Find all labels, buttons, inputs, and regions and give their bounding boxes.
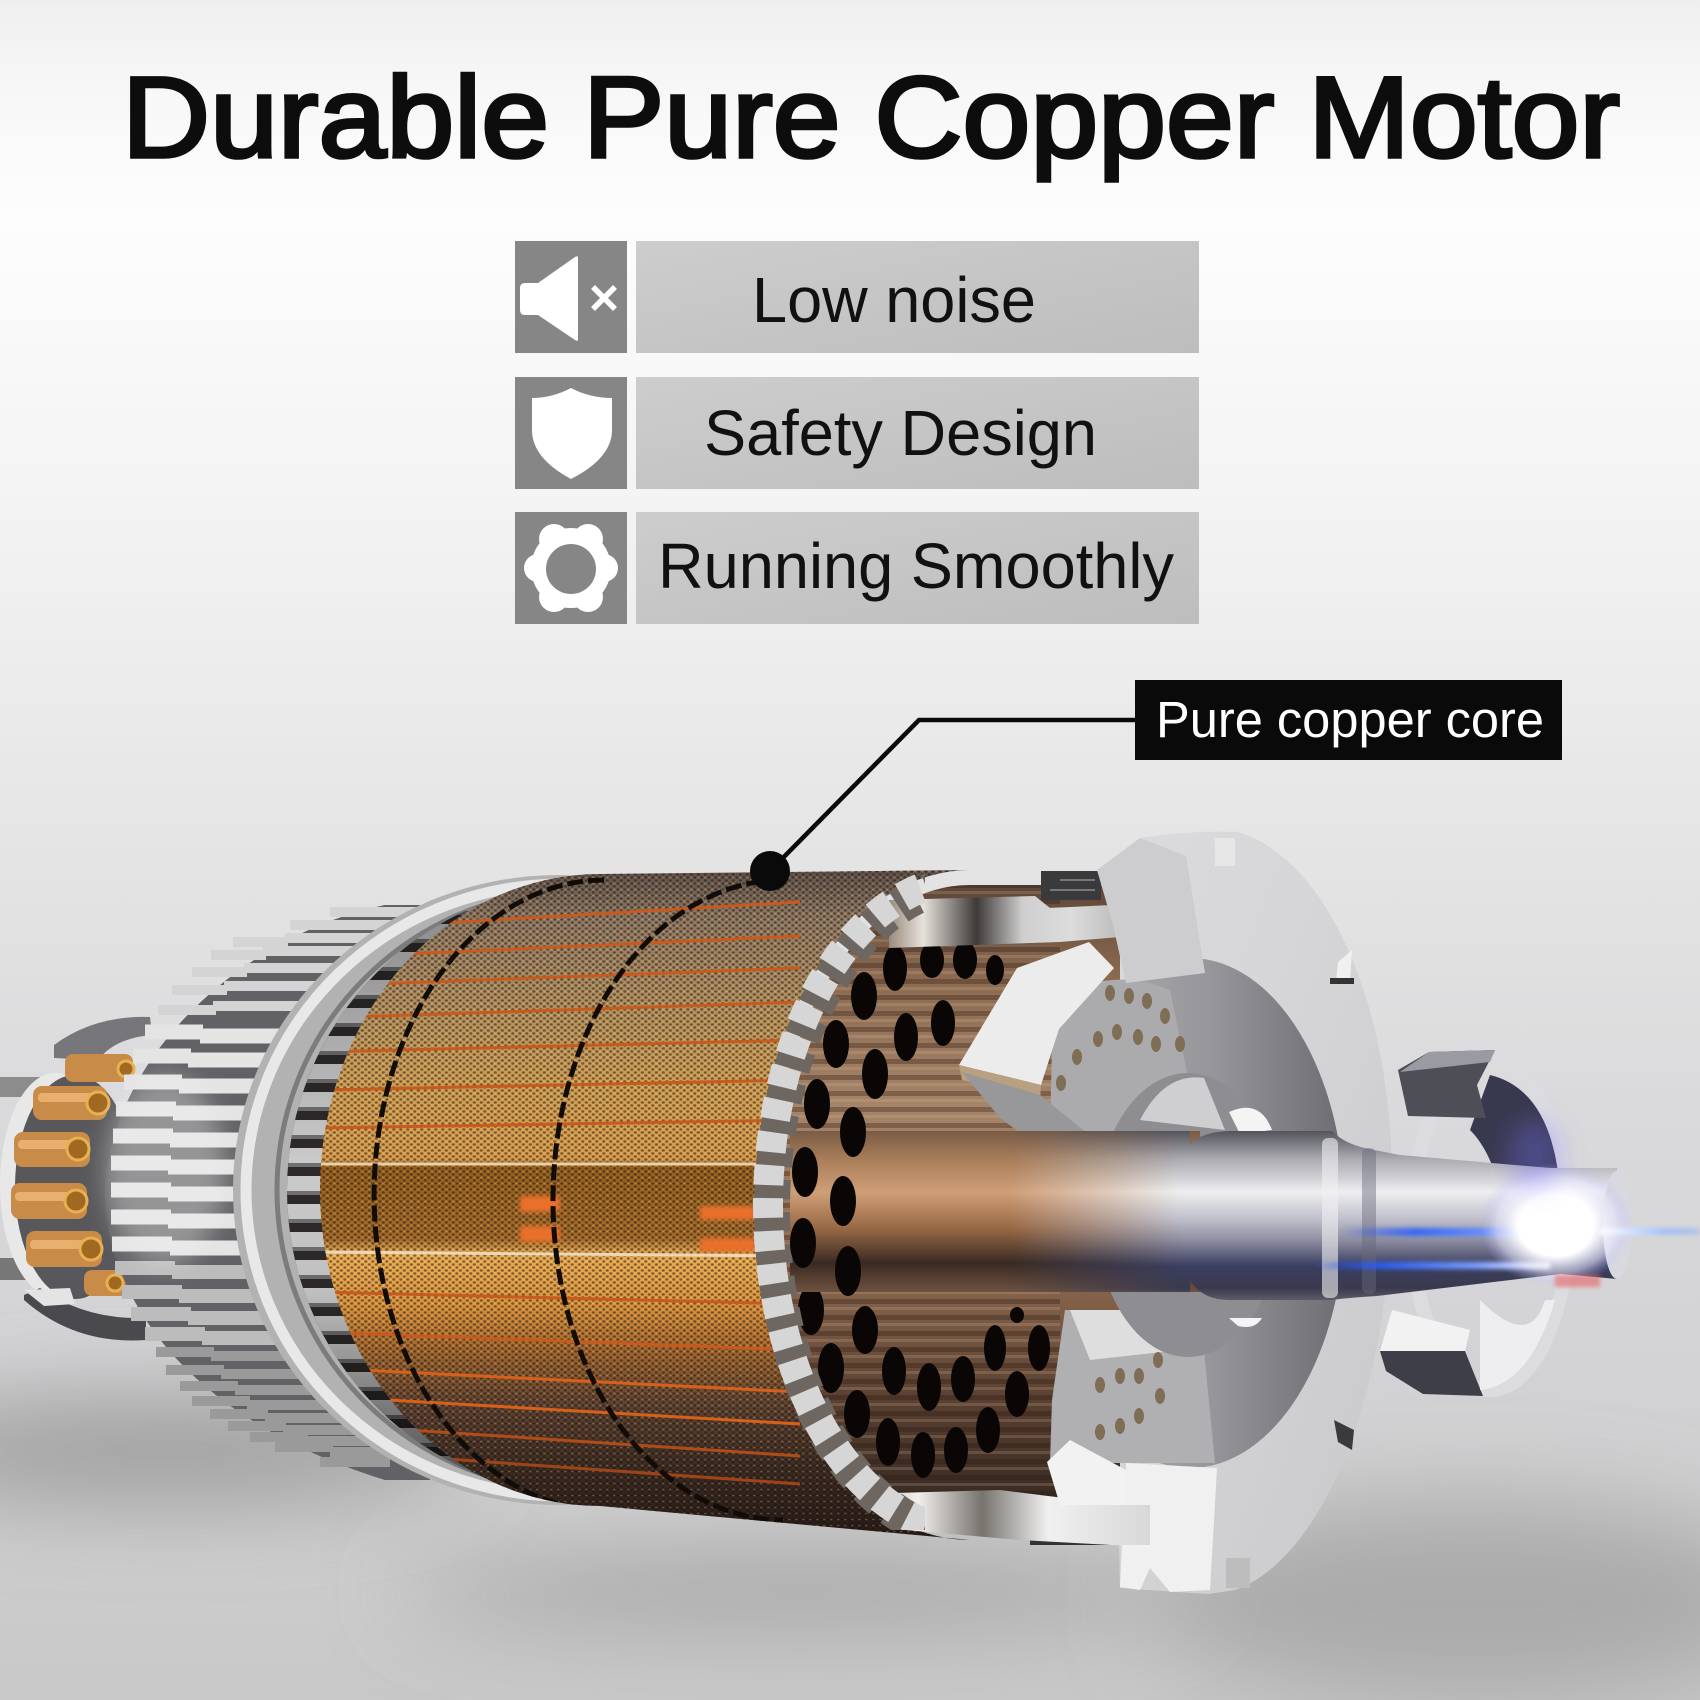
- copper winding body: [320, 870, 970, 1540]
- callout text: Pure copper core: [1156, 691, 1544, 748]
- ventilation holes: [798, 941, 1050, 1478]
- rotor comb teeth: [105, 905, 430, 1480]
- copper core shaft: [790, 1131, 1200, 1292]
- flange bolts: [1215, 838, 1354, 1588]
- lower silver band: [860, 1490, 1150, 1546]
- perforated plates: [1050, 980, 1215, 1463]
- core hole row: [790, 1079, 866, 1296]
- label bar: running smoothly: [636, 512, 1199, 624]
- motor illustration: [0, 832, 1700, 1594]
- floor shadow: [0, 1400, 1700, 1700]
- upper silver band: [889, 871, 1132, 948]
- label: low noise: Low noise: [752, 264, 1036, 336]
- dark end teeth: [287, 907, 479, 1475]
- lower flange block: [1047, 1440, 1217, 1592]
- steel shaft: [1000, 1131, 1631, 1300]
- flange cavity: [1035, 958, 1345, 1468]
- interior of motor: [770, 885, 1120, 1525]
- leader line: [770, 720, 1140, 871]
- feature row: safety design: [515, 377, 1199, 489]
- stator teeth ring: [753, 873, 925, 1530]
- icon: shield: [515, 377, 627, 489]
- icon: muted speaker: [515, 241, 627, 353]
- left bearing and copper pins: [0, 1017, 152, 1340]
- inner hub: [1096, 1073, 1280, 1357]
- label bar: safety design: [636, 377, 1199, 489]
- feature row: running smoothly: [515, 512, 1199, 624]
- silver end ring: [233, 875, 572, 1505]
- icon: gear: [515, 512, 627, 624]
- white curved stator block: [959, 942, 1120, 1162]
- feature row: low noise: [515, 241, 1199, 353]
- orange hot patches: [520, 1196, 755, 1252]
- light flare: [1310, 1119, 1700, 1287]
- flange top block: [1097, 838, 1205, 983]
- title: Durable Pure Copper Motor: [122, 54, 1620, 182]
- winding lines: [320, 902, 800, 1484]
- flange disc: [1097, 832, 1392, 1594]
- label bar: low noise: [636, 241, 1199, 353]
- leader dot: [750, 851, 790, 891]
- right bracket: [1380, 1050, 1568, 1396]
- callout box: [1135, 680, 1562, 760]
- label: running smoothly: Running Smoothly: [658, 530, 1174, 602]
- callout: pure copper core: [750, 680, 1562, 891]
- label: safety design: Safety Design: [704, 397, 1097, 469]
- section separators: [374, 880, 604, 1510]
